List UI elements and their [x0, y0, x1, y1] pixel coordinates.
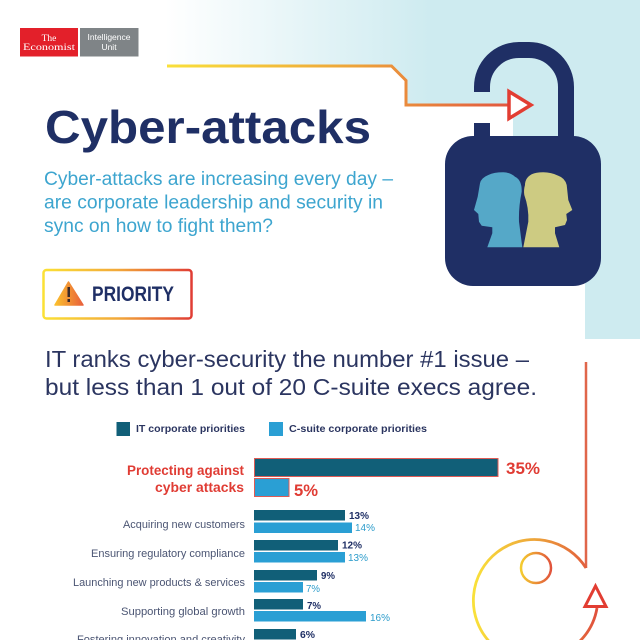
heading: IT ranks cyber-security the number #1 issue –	[45, 346, 530, 372]
row: fostering innovation and creativity	[77, 629, 316, 640]
background panel	[165, 0, 640, 339]
priority badge	[44, 270, 192, 318]
legend: C-suite corporate priorities	[289, 423, 427, 435]
logo: The Economist Intelligence Unit: Unit	[101, 42, 117, 52]
subtitle: sync on how to fight them?	[44, 216, 273, 237]
row: supporting global growth: Supporting global growth	[121, 606, 245, 618]
row: launching new products and services	[73, 570, 336, 595]
bar chart: highlighted priority: Protecting against	[127, 463, 244, 478]
row: ensuring regulatory compliance	[91, 540, 368, 564]
logo: The Economist Intelligence Unit: Intelligence	[88, 32, 131, 42]
subtitle: Cyber-attacks are increasing every day –	[44, 169, 393, 190]
row: supporting global growth	[121, 599, 390, 624]
row: ensuring regulatory compliance: 13%	[348, 552, 368, 564]
vertical connector with circular arrow	[473, 362, 606, 640]
subtitle	[44, 169, 393, 237]
bar chart: other priorities	[73, 510, 390, 640]
legend: IT corporate priorities	[136, 423, 245, 435]
bar chart: highlighted priority: cyber attacks	[155, 480, 244, 495]
logo: The Economist Intelligence Unit	[20, 28, 138, 56]
heading: but less than 1 out of 20 C-suite execs agree.	[45, 374, 537, 400]
logo: The Economist Intelligence Unit: The	[42, 34, 56, 44]
row: supporting global growth: 7%	[307, 600, 322, 612]
row: acquiring new customers	[123, 510, 375, 534]
row: acquiring new customers: 13%	[349, 510, 370, 522]
row: launching new products and services: Launching new products & services	[73, 577, 245, 589]
row: supporting global growth: 16%	[370, 612, 390, 624]
icon: padlock with two heads	[445, 50, 601, 286]
legend	[116, 422, 427, 436]
logo: The Economist Intelligence Unit: Economist	[23, 43, 75, 53]
title: Cyber-attacks	[45, 101, 371, 153]
row: acquiring new customers: Acquiring new customers	[123, 519, 245, 531]
row: launching new products and services: 7%	[306, 583, 320, 595]
row: acquiring new customers: 14%	[355, 522, 375, 534]
row: launching new products and services: 9%	[321, 570, 336, 582]
bar chart: highlighted priority	[127, 458, 540, 500]
row: ensuring regulatory compliance: Ensuring regulatory compliance	[91, 548, 245, 560]
row: ensuring regulatory compliance: 12%	[342, 540, 363, 552]
arrow line into the lock	[167, 66, 531, 118]
bar chart: highlighted priority: 35%	[506, 459, 540, 478]
priority badge: PRIORITY	[92, 283, 174, 306]
subtitle: are corporate leadership and security in	[44, 192, 383, 214]
heading	[45, 346, 537, 400]
bar chart: highlighted priority: 5%	[294, 481, 318, 500]
